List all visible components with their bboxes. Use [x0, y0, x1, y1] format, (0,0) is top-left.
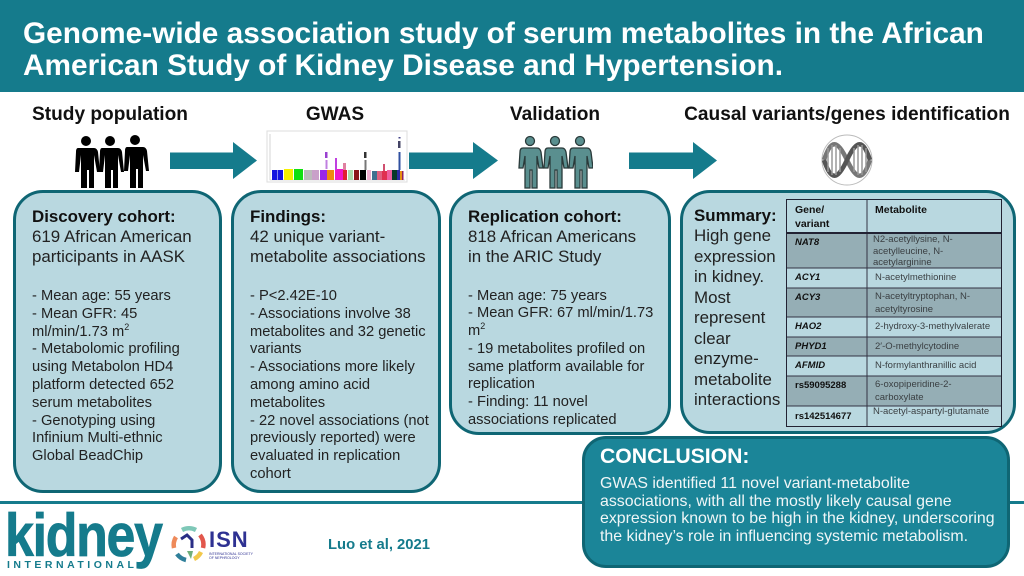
summary text: expression: [694, 246, 776, 266]
discovery bullets: using Metabolon HD4: [32, 359, 173, 375]
table: gene metabolite: [787, 200, 1001, 426]
title: Genome-wide association study of serum metabolites in the African: [23, 17, 984, 50]
panel: replication cohort: [449, 190, 671, 435]
discovery bullets: serum metabolites: [32, 395, 152, 411]
summary text: in kidney.: [694, 267, 764, 286]
findings text: [250, 206, 426, 266]
row HAO2: HAO2: [795, 321, 821, 332]
panel: discovery cohort: [13, 190, 222, 493]
summary text: metabolite: [694, 370, 772, 388]
rs59095288 metabolite: 6-oxopiperidine-2-: [875, 379, 952, 390]
summary text: Most: [694, 288, 731, 306]
rs59095288 metabolite: carboxylate: [875, 392, 924, 403]
column head: gene: [795, 204, 830, 230]
title: American Study of Kidney Disease and Hypertension.: [23, 49, 783, 82]
discovery bullets: Global BeadChip: [32, 448, 143, 464]
discovery bullets: ml/min/1.73 m2: [32, 322, 129, 340]
conclusion text: [600, 475, 995, 544]
discovery bullets: - Mean age: 55 years: [32, 288, 171, 304]
arrow 1: [170, 142, 257, 179]
discovery bullets: - Metabolomic profiling: [32, 341, 180, 357]
row NAT8: NAT8: [795, 237, 819, 248]
conclusion text: associations, with all the mostly likely causal gene: [600, 492, 952, 510]
column head: metabolite: Metabolite: [875, 204, 927, 216]
replication bullets: [468, 288, 653, 428]
ISN subtitle: OF NEPHROLOGY: [209, 556, 240, 560]
title: [23, 17, 984, 82]
findings bullets: - 22 novel associations (not: [250, 413, 429, 429]
replication bullets: replication: [468, 376, 535, 392]
findings text: metabolite associations: [250, 247, 426, 266]
ACY3 metabolites: N-acetyltryptophan, N-: [875, 291, 970, 302]
replication text: in the ARIC Study: [468, 247, 601, 266]
header banner: [0, 0, 1024, 92]
findings bullets: cohort: [250, 466, 291, 482]
AFMID metabolite: N-formylanthranillic acid: [875, 360, 976, 371]
row ACY3: ACY3: [795, 292, 820, 303]
summary text: Summary:: [694, 206, 777, 224]
NAT8 metabolites: acetylleucine, N-: [873, 246, 943, 256]
icon: validation people: [518, 136, 593, 189]
citation: Luo et al, 2021: [328, 537, 430, 553]
discovery bullets: platform detected 652: [32, 377, 174, 393]
findings bullets: evaluated in replication: [250, 448, 400, 464]
findings bullets: - Associations more likely: [250, 359, 415, 375]
logo: ISN text: [209, 527, 253, 560]
logo: kidney international: [5, 502, 164, 571]
replication bullets: - Finding: 11 novel: [468, 394, 588, 410]
findings bullets: previously reported) were: [250, 430, 416, 446]
heading: GWAS: GWAS: [306, 104, 364, 125]
icon: DNA helix: [822, 134, 872, 186]
discovery text: 619 African American: [32, 227, 192, 246]
discovery text: Discovery cohort:: [32, 206, 176, 226]
replication text: Replication cohort:: [468, 206, 622, 226]
arrow 2: [409, 142, 498, 179]
international wordmark: INTERNATIONAL: [7, 559, 137, 571]
conclusion text: expression known to be high in the kidney, underscoring: [600, 510, 995, 527]
NAT8 metabolites: N2-acetyllysine, N-: [873, 234, 953, 245]
heading: causal variants: Causal variants/genes identification: [684, 104, 1010, 125]
panel: findings: [231, 190, 441, 493]
icon: study population people: [75, 135, 149, 188]
footer rule: [0, 501, 1024, 504]
chart: Manhattan plot: [266, 130, 408, 182]
PHYD1 metabolite: 2′-O-methylcytodine: [875, 341, 959, 352]
logo: ISN ring: [171, 526, 206, 562]
table lines: [787, 200, 1001, 426]
discovery bullets: - Mean GFR: 45: [32, 306, 137, 322]
replication bullets: - 19 metabolites profiled on: [468, 341, 645, 357]
findings bullets: variants: [250, 341, 301, 357]
arrow 3: [629, 142, 717, 179]
ACY3 metabolites: [875, 291, 970, 314]
row ACY1: ACY1: [795, 272, 820, 283]
discovery bullets: [32, 288, 180, 464]
conclusion heading: CONCLUSION:: [600, 445, 749, 468]
summary text: enzyme-: [694, 349, 759, 368]
row PHYD1: PHYD1: [795, 341, 827, 352]
heading: validation: Validation: [510, 104, 600, 125]
column head: gene: variant: [795, 218, 829, 230]
findings bullets: [250, 288, 429, 482]
findings bullets: - Associations involve 38: [250, 306, 411, 322]
heading: study population: Study population: [32, 104, 188, 125]
conclusion text: the kidney’s role in influencing systemic metabolism.: [600, 528, 968, 544]
HAO2 metabolite: 2-hydroxy-3-methylvalerate: [875, 321, 990, 332]
summary text: clear: [694, 328, 731, 348]
summary text: represent: [694, 308, 765, 327]
rs59095288 metabolite: [875, 379, 952, 403]
findings text: Findings:: [250, 206, 326, 226]
replication bullets: associations replicated: [468, 412, 617, 428]
replication bullets: - Mean age: 75 years: [468, 288, 607, 304]
ACY1 metabolite: N-acetylmethionine: [875, 272, 956, 283]
ISN subtitle: INTERNATIONAL SOCIETY: [209, 552, 253, 556]
summary text: interactions: [694, 390, 780, 409]
replication bullets: m2: [468, 321, 485, 339]
ISN letters: ISN: [209, 527, 249, 552]
discovery text: [32, 206, 192, 266]
rs142514677 metabolite: N-acetyl-aspartyl-glutamate: [873, 406, 989, 417]
NAT8 metabolites: [873, 234, 953, 268]
findings bullets: - P<2.42E-10: [250, 288, 337, 304]
summary text: High gene: [694, 226, 771, 245]
row rs142514677: rs142514677: [795, 411, 852, 422]
replication bullets: same platform available for: [468, 359, 644, 375]
discovery bullets: Infinium Multi-ethnic: [32, 430, 163, 446]
findings bullets: metabolites: [250, 395, 325, 411]
findings text: 42 unique variant-: [250, 227, 385, 246]
replication bullets: - Mean GFR: 67 ml/min/1.73: [468, 305, 653, 321]
findings bullets: metabolites and 32 genetic: [250, 324, 426, 340]
replication text: [468, 206, 636, 266]
panel: summary: [680, 190, 1016, 434]
ACY3 metabolites: acetyltyrosine: [875, 304, 933, 314]
row AFMID: AFMID: [795, 360, 825, 371]
row rs59095288: rs59095288: [795, 380, 846, 391]
discovery text: participants in AASK: [32, 247, 185, 266]
NAT8 metabolites: acetylarginine: [873, 257, 932, 268]
conclusion text: GWAS identified 11 novel variant-metabolite: [600, 475, 910, 492]
panel: conclusion: [582, 436, 1010, 568]
column head: gene: Gene/: [795, 204, 824, 216]
findings bullets: among amino acid: [250, 377, 370, 393]
ISN subtitle: [209, 552, 253, 560]
summary text: [694, 206, 780, 409]
row shading: [787, 233, 1001, 268]
replication text: 818 African Americans: [468, 227, 636, 246]
discovery bullets: - Genotyping using: [32, 413, 155, 429]
kidney wordmark: kidney: [5, 502, 162, 569]
